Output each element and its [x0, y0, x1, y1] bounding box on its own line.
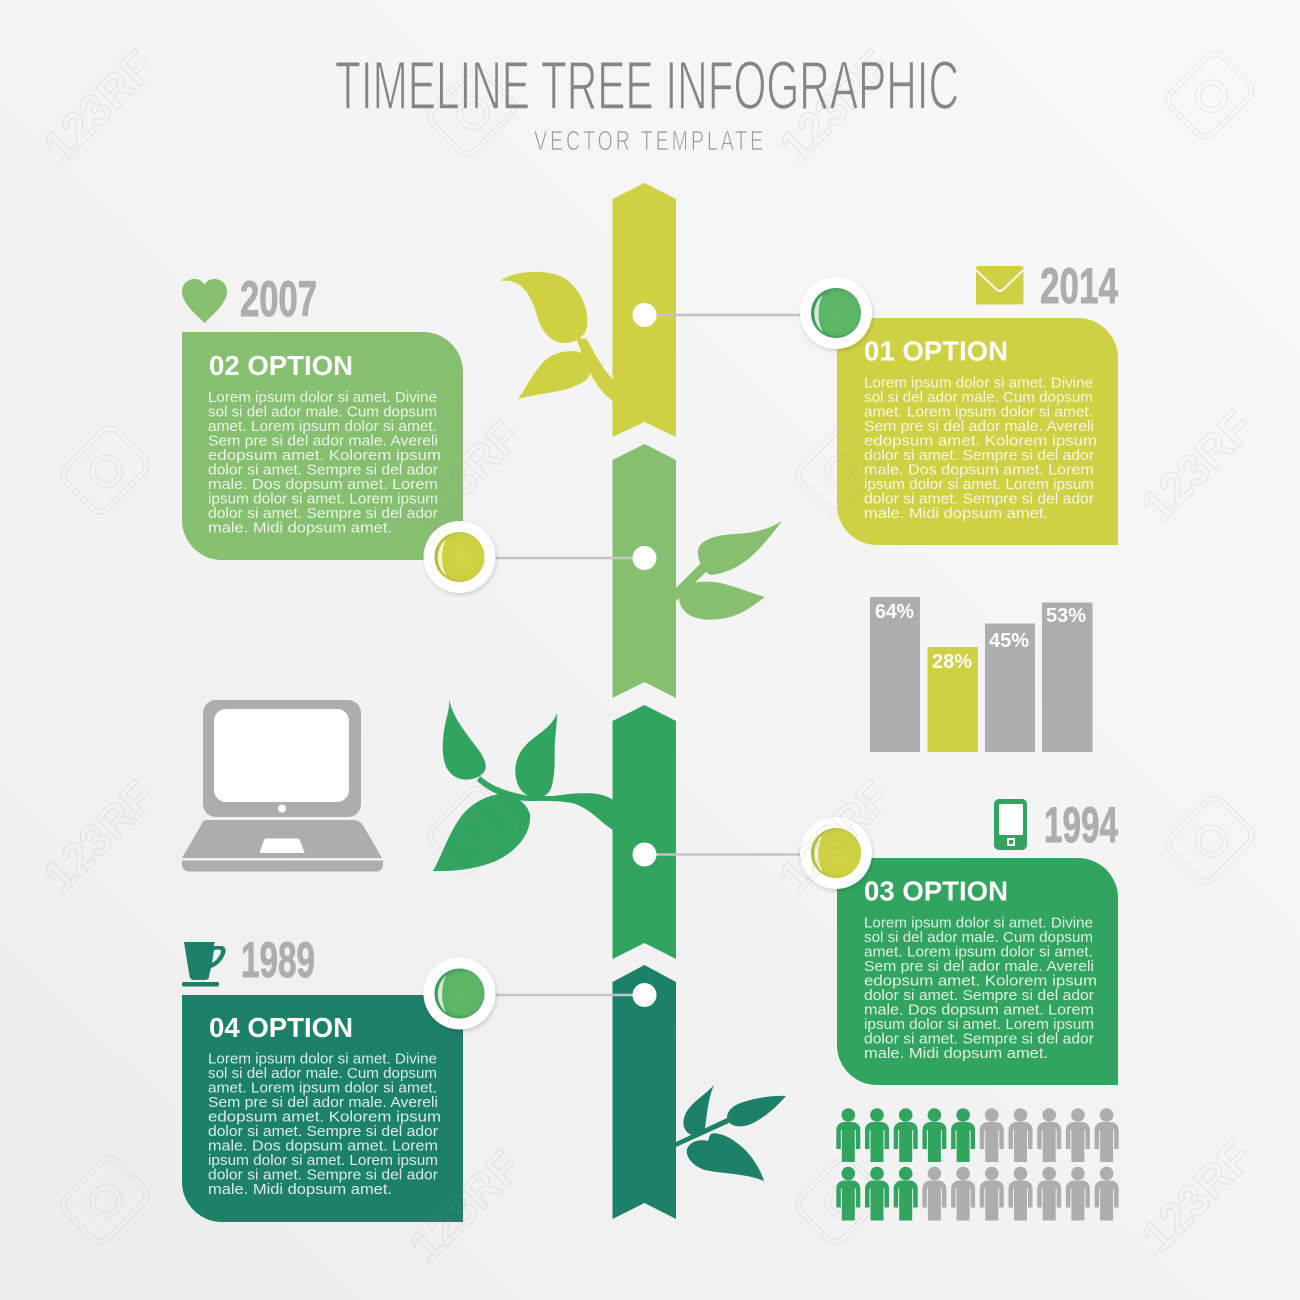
text block: 02 option: male. Dos dopsum amet. Lorem	[208, 477, 438, 493]
text block: 03 option: edopsum amet. Kolorem ipsum	[864, 974, 1097, 990]
text block: 02 option: Sem pre si del ador male. Avereli	[208, 434, 438, 450]
bar: 64%: 64%	[875, 601, 914, 623]
timeline stem	[612, 183, 676, 1219]
stem segment 4	[612, 965, 676, 1219]
text block: 03 option: amet. Lorem ipsum dolor si amet.	[864, 944, 1093, 960]
text block: 02 option: male. Midi dopsum amet.	[208, 520, 392, 536]
marker: 02 lime button	[424, 521, 496, 593]
stock watermark: 123RF	[33, 770, 165, 902]
icon: heart	[182, 279, 227, 323]
text block: 04 option: sol si del ador male. Cum dopsum	[208, 1066, 437, 1082]
text block: 01 option: Lorem ipsum dolor si amet. Divine	[864, 376, 1093, 392]
leaves: green branch	[433, 698, 613, 871]
connector: 03	[632, 842, 806, 866]
text block: 03 option: Lorem ipsum dolor si amet. Divine	[864, 916, 1093, 932]
text block: 03 option: sol si del ador male. Cum dopsum	[864, 930, 1093, 946]
bar: 45%: 45%	[989, 630, 1029, 652]
bar: 28%: 28%	[932, 651, 972, 673]
icon: envelope	[976, 266, 1024, 304]
text block: 04 option: male. Dos dopsum amet. Lorem	[208, 1138, 438, 1154]
text block: 02 option: edopsum amet. Kolorem ipsum	[208, 448, 441, 464]
marker: 03 lime button	[800, 817, 872, 889]
heading: 02 option: 02 OPTION	[209, 350, 353, 381]
text block: 03 option: male. Dos dopsum amet. Lorem	[864, 1002, 1094, 1018]
text block: 01 option: edopsum amet. Kolorem ipsum	[864, 434, 1097, 450]
text block: 01 option: dolor si amet. Sempre si del ador	[864, 492, 1094, 508]
text block: 04 option: dolor si amet. Sempre si del ador	[208, 1124, 438, 1140]
stock watermark: 123RF	[1131, 1130, 1263, 1262]
text block: 03 option	[864, 916, 1097, 1062]
text block: 04 option: male. Midi dopsum amet.	[208, 1182, 392, 1198]
year: 1994: 1994	[1044, 797, 1118, 853]
text block: 04 option: edopsum amet. Kolorem ipsum	[208, 1110, 441, 1126]
text block: 01 option: dolor si amet. Sempre si del ador	[864, 448, 1094, 464]
subtitle: VECTOR TEMPLATE	[534, 125, 766, 156]
text block: 01 option: male. Midi dopsum amet.	[864, 506, 1048, 522]
text block: 02 option: sol si del ador male. Cum dopsum	[208, 404, 437, 420]
bar chart	[870, 597, 1092, 752]
marker: 01 green button	[800, 277, 872, 349]
text block: 02 option: amet. Lorem ipsum dolor si amet.	[208, 419, 437, 435]
marker: 04 green button	[424, 958, 496, 1030]
text block: 03 option: dolor si amet. Sempre si del ador	[864, 1032, 1094, 1048]
stock watermark: 123RF	[769, 770, 901, 902]
panel: 01 option	[837, 318, 1118, 545]
icon: laptop	[182, 700, 383, 872]
panel: 02 option	[182, 332, 463, 560]
bar: 53%	[1042, 602, 1092, 752]
icon: coffee cup	[182, 942, 226, 986]
leaves: light green branch	[675, 521, 782, 620]
heading: 04 option: 04 OPTION	[209, 1012, 353, 1043]
stem segment 3	[612, 705, 676, 959]
text block: 02 option: Lorem ipsum dolor si amet. Divine	[208, 390, 437, 406]
stock watermark: 123RF	[399, 410, 531, 542]
bar: 64%	[870, 597, 920, 752]
stem segment 1	[612, 183, 676, 437]
connector: 04	[490, 983, 656, 1007]
year: 1989: 1989	[241, 932, 315, 988]
text block: 04 option	[208, 1052, 441, 1198]
stock watermark: 123RF	[769, 40, 901, 172]
connector: 01	[632, 303, 806, 327]
connector: 02	[490, 546, 656, 570]
leaves: lime branch	[500, 272, 613, 401]
text block: 01 option: Sem pre si del ador male. Avereli	[864, 419, 1094, 435]
text block: 04 option: dolor si amet. Sempre si del ador	[208, 1168, 438, 1184]
bar: 45%	[985, 624, 1035, 752]
panel: 03 option	[837, 858, 1118, 1085]
text block: 03 option: dolor si amet. Sempre si del ador	[864, 988, 1094, 1004]
text block: 01 option: sol si del ador male. Cum dopsum	[864, 390, 1093, 406]
text block: 03 option: ipsum dolor si amet. Lorem ipsum	[864, 1017, 1094, 1033]
leaves: teal branch	[676, 1085, 786, 1181]
heading: 01 option: 01 OPTION	[864, 336, 1008, 366]
pictogram: people	[836, 1108, 1119, 1220]
text block: 01 option	[864, 376, 1097, 522]
text block: 01 option: amet. Lorem ipsum dolor si amet.	[864, 404, 1093, 420]
people row 1	[836, 1108, 1119, 1162]
stem segment 2	[612, 444, 676, 698]
text block: 04 option: Sem pre si del ador male. Avereli	[208, 1095, 438, 1111]
panel: 04 option	[182, 995, 463, 1222]
text block: 01 option: ipsum dolor si amet. Lorem ipsum	[864, 477, 1094, 493]
bar: 53%: 53%	[1046, 605, 1086, 627]
text block: 02 option: dolor si amet. Sempre si del ador	[208, 506, 438, 522]
text block: 02 option: ipsum dolor si amet. Lorem ipsum	[208, 492, 438, 508]
text block: 03 option: male. Midi dopsum amet.	[864, 1046, 1048, 1062]
text block: 04 option: ipsum dolor si amet. Lorem ipsum	[208, 1153, 438, 1169]
heading: 03 option: 03 OPTION	[864, 876, 1008, 906]
stock watermark: 123RF	[399, 1140, 531, 1272]
stock watermark: 123RF	[1131, 400, 1263, 532]
year: 2014: 2014	[1040, 258, 1118, 314]
icon: mobile phone	[994, 799, 1027, 850]
text block: 02 option: dolor si amet. Sempre si del ador	[208, 462, 438, 478]
people row 2	[836, 1167, 1119, 1220]
bar: 28%	[928, 647, 978, 752]
text block: 04 option: amet. Lorem ipsum dolor si amet.	[208, 1080, 437, 1096]
stock watermark: 123RF	[33, 40, 165, 172]
text block: 01 option: male. Dos dopsum amet. Lorem	[864, 462, 1094, 478]
text block: 03 option: Sem pre si del ador male. Avereli	[864, 959, 1094, 975]
year: 2007: 2007	[240, 271, 317, 327]
text block: 04 option: Lorem ipsum dolor si amet. Divine	[208, 1052, 437, 1068]
text block: 02 option	[208, 390, 441, 536]
